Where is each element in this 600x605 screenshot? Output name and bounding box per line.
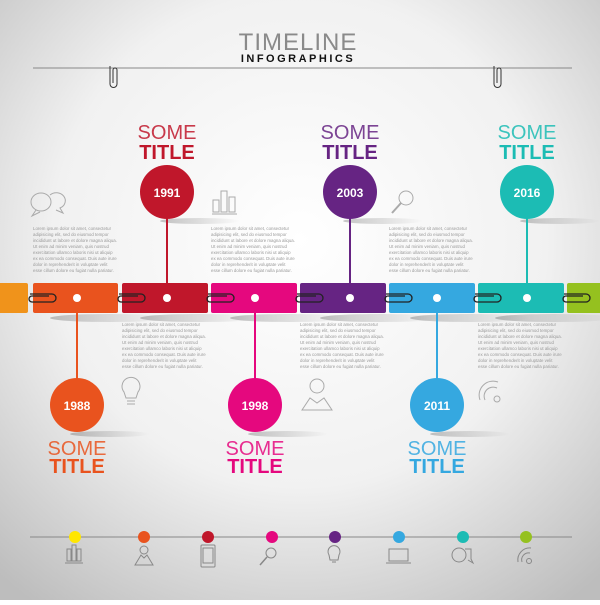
milestone 2011: TITLE xyxy=(409,456,465,478)
milestone 2003: SOME xyxy=(321,122,379,144)
milestone 1988: SOME xyxy=(48,438,106,460)
milestone 2003 xyxy=(321,122,379,219)
bottom legend line xyxy=(30,531,572,543)
milestone 1988: 1988 xyxy=(64,399,91,413)
timeline bar xyxy=(0,283,600,313)
title: INFOGRAPHICS xyxy=(241,53,355,65)
title: TIMELINE xyxy=(239,29,357,56)
milestone 1998: SOME xyxy=(226,438,284,460)
top rule with paperclips xyxy=(33,66,572,88)
milestone 1991: SOME xyxy=(138,122,196,144)
shadows xyxy=(50,218,600,437)
faint icons xyxy=(31,191,500,410)
milestone 1998: 1998 xyxy=(242,399,269,413)
milestone 1988: TITLE xyxy=(49,456,105,478)
milestone 1991 xyxy=(138,122,196,219)
milestone 1998 xyxy=(226,378,284,478)
milestone 2003: TITLE xyxy=(322,142,378,164)
milestone 2011 xyxy=(408,378,466,478)
milestone 1991: 1991 xyxy=(154,186,181,200)
milestone 2016: TITLE xyxy=(499,142,555,164)
milestone 2003: 2003 xyxy=(337,186,364,200)
milestone 2016: 2016 xyxy=(514,186,541,200)
milestone 2016 xyxy=(498,122,556,219)
milestone 2016: SOME xyxy=(498,122,556,144)
milestone 2011: SOME xyxy=(408,438,466,460)
milestone 1998: TITLE xyxy=(227,456,283,478)
text blocks xyxy=(33,226,562,369)
connector lines xyxy=(77,215,527,382)
milestone 1988 xyxy=(48,378,106,478)
milestone 2011: 2011 xyxy=(424,399,450,413)
bottom icons xyxy=(65,545,532,567)
milestone 1991: TITLE xyxy=(139,142,195,164)
